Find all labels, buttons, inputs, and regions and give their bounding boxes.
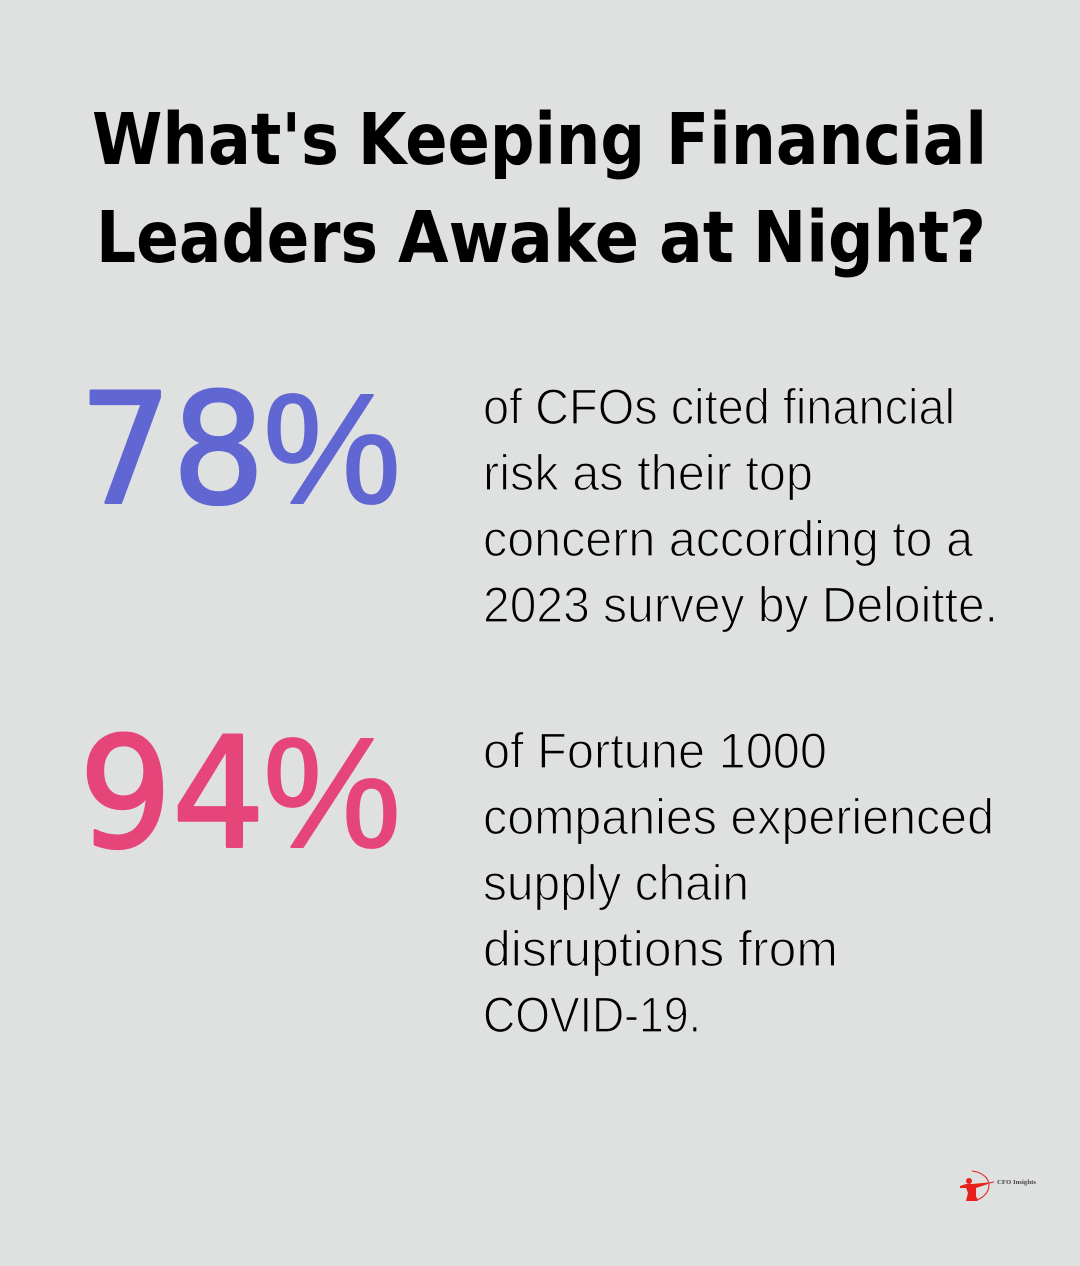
text block: Fortune 1000 supply chain: disruptions from — [483, 921, 838, 977]
title: Keeping — [358, 98, 645, 181]
title: Financial — [666, 98, 987, 181]
text block: Fortune 1000 supply chain: companies experienced — [483, 789, 994, 845]
text block: CFO financial risk: concern according to a — [483, 511, 973, 567]
stat: 94%: % — [263, 706, 401, 881]
title: What's — [92, 98, 339, 181]
text block: Fortune 1000 supply chain: supply chain — [483, 855, 749, 911]
title: Night? — [753, 196, 986, 279]
text block: CFO financial risk: risk as their top — [483, 445, 813, 501]
stat: 78%: 78 — [79, 362, 265, 540]
icon: archer with bow — [960, 1171, 994, 1201]
stat: 94%: 94 — [79, 706, 265, 884]
stat: 78% — [79, 362, 401, 540]
text block: CFO financial risk: of CFOs cited financial — [483, 379, 955, 435]
stat: 94% — [79, 706, 401, 884]
text block: Fortune 1000 supply chain: of Fortune 1000 — [483, 723, 827, 779]
stat: 78%: % — [263, 362, 401, 537]
text block: CFO financial risk — [483, 379, 998, 633]
title: at — [659, 196, 734, 279]
logo wordmark: CFO Insights — [997, 1179, 1036, 1186]
text block: Fortune 1000 supply chain — [483, 723, 994, 1043]
logo: CFO Insights archer — [960, 1171, 1036, 1201]
title: Leaders — [96, 196, 378, 279]
title: Awake — [398, 196, 639, 279]
text block: CFO financial risk: 2023 survey by Deloitte. — [483, 577, 998, 633]
title — [92, 98, 987, 279]
text block: Fortune 1000 supply chain: COVID-19. — [483, 987, 701, 1043]
